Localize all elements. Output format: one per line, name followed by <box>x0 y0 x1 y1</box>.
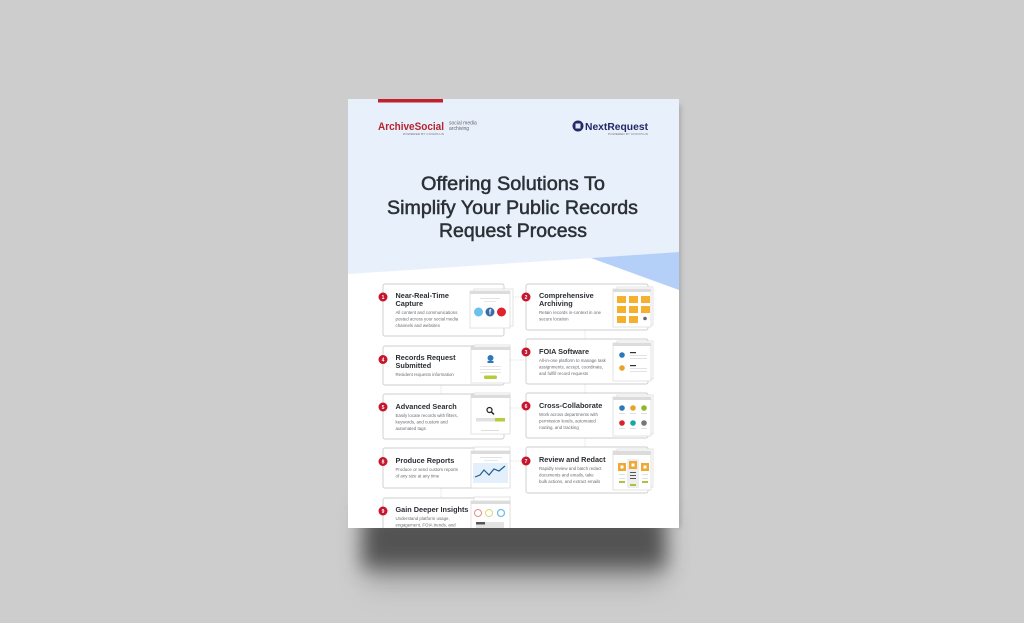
logo: NextRequest: NextRequest <box>585 121 648 133</box>
step 5 card <box>378 393 510 439</box>
step 1 card: All content and communications <box>396 310 458 315</box>
step 5 card: automated tags <box>396 426 427 431</box>
step 2 card: 2 <box>525 295 528 301</box>
step 3 card: assignments, accept, coordinate, <box>539 364 603 370</box>
step 4 card: Resident requests information <box>396 372 454 377</box>
step 2 card: Retain records in-context in one <box>539 310 602 315</box>
step 1 card: channels and websites <box>396 323 441 328</box>
step 2 card: secure location <box>539 316 569 322</box>
step 2 card: Archiving <box>539 299 573 308</box>
step 8 card: Produce or send custom reports <box>396 467 459 472</box>
title: Request Process <box>439 221 587 242</box>
step 1 card: Near-Real-Time <box>396 291 449 300</box>
step 6 card: permission levels, automated <box>539 418 596 424</box>
step 3 card: 3 <box>525 350 528 356</box>
step 3 card: FOIA Software <box>539 347 589 356</box>
title: Offering Solutions To <box>421 174 605 195</box>
logo: ArchiveSocial: social media <box>449 120 477 126</box>
logo: NextRequest: POWERED BY CIVICPLUS <box>608 132 648 136</box>
red top tab <box>378 99 443 102</box>
step 7 card: Rapidly review and batch redact <box>539 466 602 471</box>
step 7 card: 7 <box>525 459 528 465</box>
step 9 card: Gain Deeper Insights <box>396 505 468 514</box>
step 5 card: Easily locate records with filters, <box>396 413 458 418</box>
step 8 card <box>378 447 510 488</box>
step 3 card <box>522 339 653 384</box>
step 6 card: Cross-Collaborate <box>539 401 602 410</box>
step 4 card: 4 <box>382 357 385 363</box>
header blue corner shape <box>591 252 679 290</box>
step 6 card: 6 <box>525 404 528 410</box>
step 1 card: 1 <box>382 295 385 301</box>
step 2 card <box>522 284 653 330</box>
step 8 card: 8 <box>382 459 385 465</box>
step 1 card: f <box>489 310 492 316</box>
step 6 card <box>522 393 653 438</box>
logo: ArchiveSocial: POWERED BY CIVICPLUS <box>403 132 444 136</box>
step 1 card: posted across your social media <box>396 316 459 322</box>
step 1 card <box>378 284 513 336</box>
step 9 card <box>378 496 510 528</box>
title: Simplify Your Public Records <box>387 198 638 219</box>
step 1 card: Capture <box>396 299 423 308</box>
step 4 card: Records Request <box>396 353 456 362</box>
document page <box>348 99 679 538</box>
step 6 card: Work across departments with <box>539 412 599 417</box>
step 8 card: Produce Reports <box>396 456 454 465</box>
step 7 card: Review and Redact <box>539 455 606 464</box>
step 6 card: routing, and tracking <box>539 425 579 430</box>
step 7 card: bulk actions, and extract emails <box>539 479 601 484</box>
step 4 card: Submitted <box>396 361 431 370</box>
step 3 card: All-in-one platform to manage task <box>539 358 607 363</box>
step 9 card: Understand platform usage, <box>396 516 450 521</box>
step 7 card: documents and emails, take <box>539 472 594 478</box>
logo: ArchiveSocial: ArchiveSocial <box>378 121 444 133</box>
step 5 card: keywords, and custom and <box>396 420 448 424</box>
step 3 card: and fulfill record requests <box>539 371 589 376</box>
step 9 card: engagement, FOIA trends, and <box>396 522 456 528</box>
step 5 card: Advanced Search <box>396 402 457 411</box>
step 2 card: Comprehensive <box>539 291 594 300</box>
step 7 card <box>522 447 653 493</box>
connectors <box>441 297 585 498</box>
step 4 card <box>378 345 510 385</box>
step 9 card: 9 <box>382 509 385 515</box>
title <box>387 174 638 242</box>
step 8 card: of any size at any time <box>396 474 440 478</box>
logo: ArchiveSocial: archiving <box>449 126 469 132</box>
page header background <box>348 252 679 528</box>
page drop shadow <box>362 105 681 586</box>
step 5 card: 5 <box>382 405 385 411</box>
logo: NextRequest <box>572 120 648 136</box>
logo: ArchiveSocial <box>378 120 477 136</box>
